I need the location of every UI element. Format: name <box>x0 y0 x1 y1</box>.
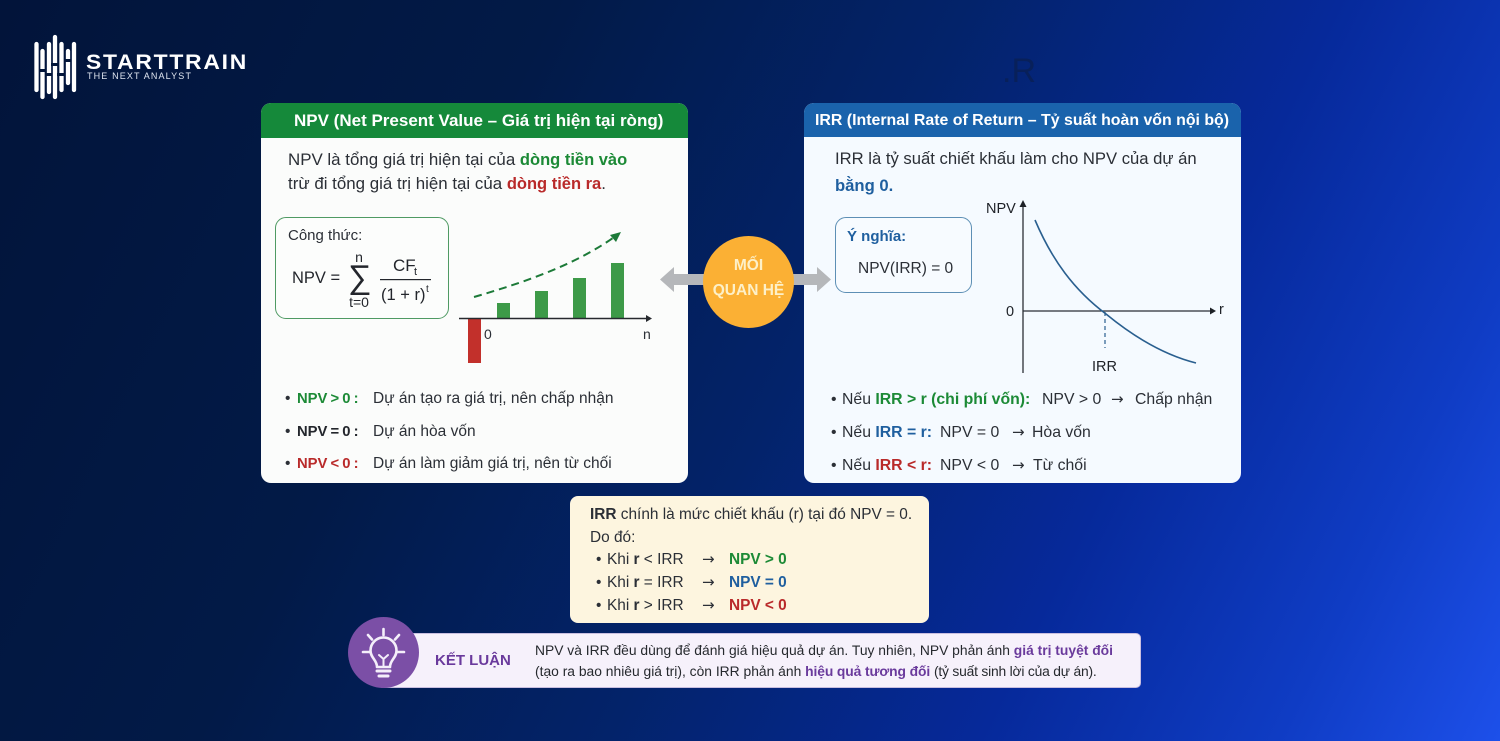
cash flow bar chart: n <box>643 326 651 342</box>
IRR decision rules: • <box>831 391 837 408</box>
link cases: Khi r < IRR <box>607 551 684 568</box>
IRR decision rules: Nếu IRR < r: <box>842 457 932 474</box>
NPV heading bar <box>261 103 688 138</box>
connector: double arrow <box>660 267 831 292</box>
NPV decision rules: NPV = 0 : <box>297 424 359 440</box>
conclusion bar <box>378 633 1141 688</box>
link cases: NPV < 0 <box>729 597 787 614</box>
meaning equation: NPV(IRR) = 0 <box>858 260 953 277</box>
NPV formula: n <box>355 249 363 265</box>
link statement: IRR chính là mức chiết khấu (r) tại đó NPV = 0. <box>590 506 912 523</box>
relationship circle: QUAN HỆ <box>713 282 784 299</box>
cash flow bar chart <box>459 232 652 363</box>
link statement <box>590 506 912 546</box>
NPV definition: trừ đi tổng giá trị hiện tại của dòng tiền ra. <box>288 174 606 193</box>
link statement: Do đó: <box>590 529 635 546</box>
IRR heading bar: IRR (Internal Rate of Return – Tỷ suất hoàn vốn nội bộ) <box>815 112 1229 129</box>
link cases <box>596 550 787 614</box>
IRR decision rules: → <box>1111 390 1124 408</box>
link cases: → <box>702 596 715 614</box>
formula label: Công thức: <box>288 227 362 244</box>
link cases: • <box>596 551 601 568</box>
IRR decision rules: Nếu IRR > r (chi phí vốn): <box>842 391 1030 408</box>
link cases: → <box>702 573 715 591</box>
panel: conclusion <box>348 617 1141 688</box>
IRR decision rules: Hòa vốn <box>1032 424 1091 441</box>
panel: IRR and NPV link <box>570 496 929 623</box>
brand name: STARTTRAIN <box>86 51 248 74</box>
NPV decision rules: Dự án làm giảm giá trị, nên từ chối <box>373 455 612 472</box>
IRR decision rules: Chấp nhận <box>1135 391 1212 408</box>
icon: light bulb <box>348 617 419 688</box>
NPV formula: NPV = <box>292 269 340 287</box>
conclusion text <box>535 642 1113 679</box>
NPV decision rules: • <box>285 455 290 472</box>
IRR decision rules: → <box>1012 456 1025 474</box>
NPV decision rules: Dự án hòa vốn <box>373 422 476 440</box>
IRR decision rules: • <box>831 424 837 441</box>
NPV decision rules <box>285 390 613 472</box>
conclusion text: (tạo ra bao nhiêu giá trị), còn IRR phản ánh hiệu quả tương đối (tỷ suất sinh lời của dự án). <box>535 663 1097 679</box>
NPV definition: NPV là tổng giá trị hiện tại của dòng tiền vào <box>288 150 627 169</box>
NPV-r curve chart: 0 <box>1006 304 1014 320</box>
IRR decision rules: • <box>831 457 837 474</box>
NPV decision rules: • <box>285 390 290 407</box>
conclusion label: KẾT LUẬN <box>435 652 511 669</box>
NPV-r curve chart: IRR <box>1092 359 1117 375</box>
IRR decision rules: Nếu IRR = r: <box>842 424 932 441</box>
IRR decision rules: NPV > 0 <box>1042 391 1101 408</box>
link cases: • <box>596 574 601 591</box>
IRR definition: IRR là tỷ suất chiết khấu làm cho NPV của dự án <box>835 149 1197 168</box>
link cases: NPV > 0 <box>729 551 787 568</box>
panel: IRR <box>804 103 1241 483</box>
NPV-r curve chart: NPV <box>986 201 1016 217</box>
IRR decision rules: Từ chối <box>1033 457 1087 474</box>
faint stray mark: .R <box>1002 52 1036 90</box>
IRR definition: bằng 0. <box>835 176 893 195</box>
NPV decision rules: NPV > 0 : <box>297 391 359 407</box>
relationship circle <box>703 236 794 328</box>
NPV formula: ∑ <box>348 258 372 295</box>
NPV formula: t=0 <box>349 294 369 310</box>
NPV decision rules: NPV < 0 : <box>297 456 359 472</box>
conclusion text: NPV và IRR đều dùng để đánh giá hiệu quả dự án. Tuy nhiên, NPV phản ánh giá trị tuyệt đối <box>535 642 1113 658</box>
meaning label: Ý nghĩa: <box>847 228 906 245</box>
relationship circle: MỐI <box>734 257 763 274</box>
NPV formula: t <box>414 266 417 278</box>
icon: logo equalizer bars <box>34 34 76 100</box>
NPV formula: t <box>426 284 429 295</box>
logo: StartTrain <box>34 34 248 100</box>
NPV definition <box>288 150 627 193</box>
link cases: → <box>702 550 715 568</box>
meaning box <box>835 217 972 293</box>
link cases: Khi r = IRR <box>607 574 684 591</box>
cash flow bar chart: 0 <box>484 326 492 342</box>
NPV decision rules: • <box>285 422 290 440</box>
IRR decision rules: NPV < 0 <box>940 457 999 474</box>
link cases: • <box>596 597 601 614</box>
IRR decision rules: NPV = 0 <box>940 424 999 441</box>
NPV-r curve chart <box>986 200 1224 375</box>
panel: NPV <box>261 103 688 483</box>
formula box <box>275 217 449 319</box>
IRR definition <box>835 149 1197 195</box>
NPV formula <box>292 249 431 310</box>
IRR decision rules: → <box>1012 423 1025 441</box>
NPV-r curve chart: r <box>1219 302 1224 318</box>
NPV decision rules: Dự án tạo ra giá trị, nên chấp nhận <box>373 390 613 407</box>
IRR heading bar <box>804 103 1241 137</box>
link cases: NPV = 0 <box>729 574 787 591</box>
NPV formula: CF <box>393 256 416 275</box>
IRR decision rules <box>831 390 1212 474</box>
tagline: THE NEXT ANALYST <box>87 71 192 81</box>
link cases: Khi r > IRR <box>607 597 684 614</box>
NPV formula: (1 + r) <box>381 286 425 304</box>
NPV heading bar: NPV (Net Present Value – Giá trị hiện tại ròng) <box>294 111 663 130</box>
